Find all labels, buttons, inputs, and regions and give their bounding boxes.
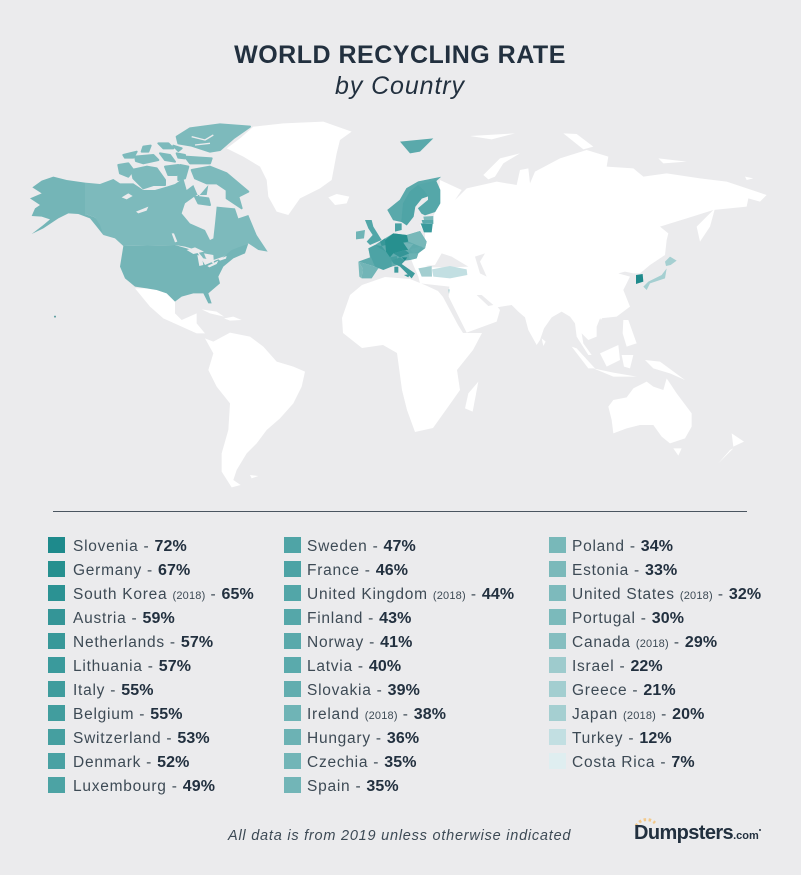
legend row: Turkey: Turkey - 12% [572,730,672,747]
United Kingdom and Ireland [356,220,382,245]
title [234,41,566,100]
legend row: Estonia: Estonia - 33% [572,562,677,579]
Netherlands and Belgium [375,238,386,252]
legend row: Hungary: Hungary - 36% [307,730,419,747]
Canadian Arctic islands [118,124,250,208]
Germany [385,233,408,257]
Black Sea, Caspian Sea and Persian Gulf [425,253,493,306]
Canada lakes [122,193,177,242]
Latin America [135,288,305,487]
France [368,245,392,270]
legend row: Portugal: Portugal - 30% [572,610,684,627]
legend row: United States: United States (2018) - 32% [572,586,761,603]
map: Africa [342,277,482,432]
legend row: Denmark: Denmark - 52% [73,754,189,771]
Israel [448,289,450,294]
footnote: All data is from 2019 unless otherwise indicated [227,828,571,844]
legend row: Italy: Italy - 55% [73,682,154,699]
Czechia, Slovakia and Hungary [403,243,422,260]
world map [30,122,767,487]
Finland [418,181,440,215]
logo: Dumpsters.com: Dumpsters.com [634,822,759,844]
legend row: Netherlands: Netherlands - 57% [73,634,213,651]
Sardinia and Sicily [394,267,410,277]
Costa Rica marker [54,316,56,318]
legend row: Israel: Israel - 22% [572,658,663,675]
map: Americas [30,122,352,487]
legend row: South Korea: South Korea (2018) - 65% [73,586,254,603]
Norway [388,177,440,222]
legend row: Slovakia: Slovakia - 39% [307,682,420,699]
title: by Country [335,72,466,100]
legend row: Greece: Greece - 21% [572,682,676,699]
legend: column 1 [48,537,254,795]
South Korea [636,274,643,284]
Italy [392,257,415,278]
islands [465,133,753,463]
legend row: Norway: Norway - 41% [307,634,412,651]
Western and central Europe base [358,231,427,268]
legend row: Switzerland: Switzerland - 53% [73,730,210,747]
Greenland and Iceland [227,122,352,215]
Eurasia [410,150,767,355]
legend row: Spain: Spain - 35% [307,778,399,795]
legend row: United Kingdom: United Kingdom (2018) - 44% [307,586,514,603]
legend row: Lithuania: Lithuania - 57% [73,658,191,675]
Spain and Portugal [358,262,378,278]
Great Lakes [187,247,227,267]
legend row: Czechia: Czechia - 35% [307,754,417,771]
legend row: France: France - 46% [307,562,408,579]
legend row: Poland: Poland - 34% [572,538,673,555]
legend row: Austria: Austria - 59% [73,610,175,627]
legend: column 3 [549,537,761,771]
Turkey [432,266,467,278]
legend row: Luxembourg: Luxembourg - 49% [73,778,215,795]
Alaska [30,177,103,235]
map: Europe [356,177,467,294]
legend divider [53,511,747,512]
Baltic states [421,216,433,232]
icon: sun rays [636,820,655,826]
title: WORLD RECYCLING RATE [234,41,566,69]
Sweden [402,185,428,225]
legend row: Canada: Canada (2018) - 29% [572,634,717,651]
USA [120,243,248,303]
legend: column 2 [284,537,514,795]
Greece [418,266,432,277]
Poland [407,231,427,248]
legend row: Latvia: Latvia - 40% [307,658,401,675]
legend row: Slovenia: Slovenia - 72% [73,538,187,555]
legend row: Sweden: Sweden - 47% [307,538,416,555]
Svalbard [400,138,433,153]
legend row: Finland: Finland - 43% [307,610,411,627]
legend row: Ireland: Ireland (2018) - 38% [307,706,446,723]
legend row: Japan: Japan (2018) - 20% [572,706,704,723]
Denmark [395,223,402,232]
Canada mainland [85,178,268,260]
Japan [643,257,677,290]
map: Eurasia and Oceania [400,133,767,463]
legend row: Belgium: Belgium - 55% [73,706,183,723]
legend row: Germany: Germany - 67% [73,562,190,579]
legend row: Costa Rica: Costa Rica - 7% [572,754,695,771]
Austria, Slovenia and Switzerland [390,250,409,261]
